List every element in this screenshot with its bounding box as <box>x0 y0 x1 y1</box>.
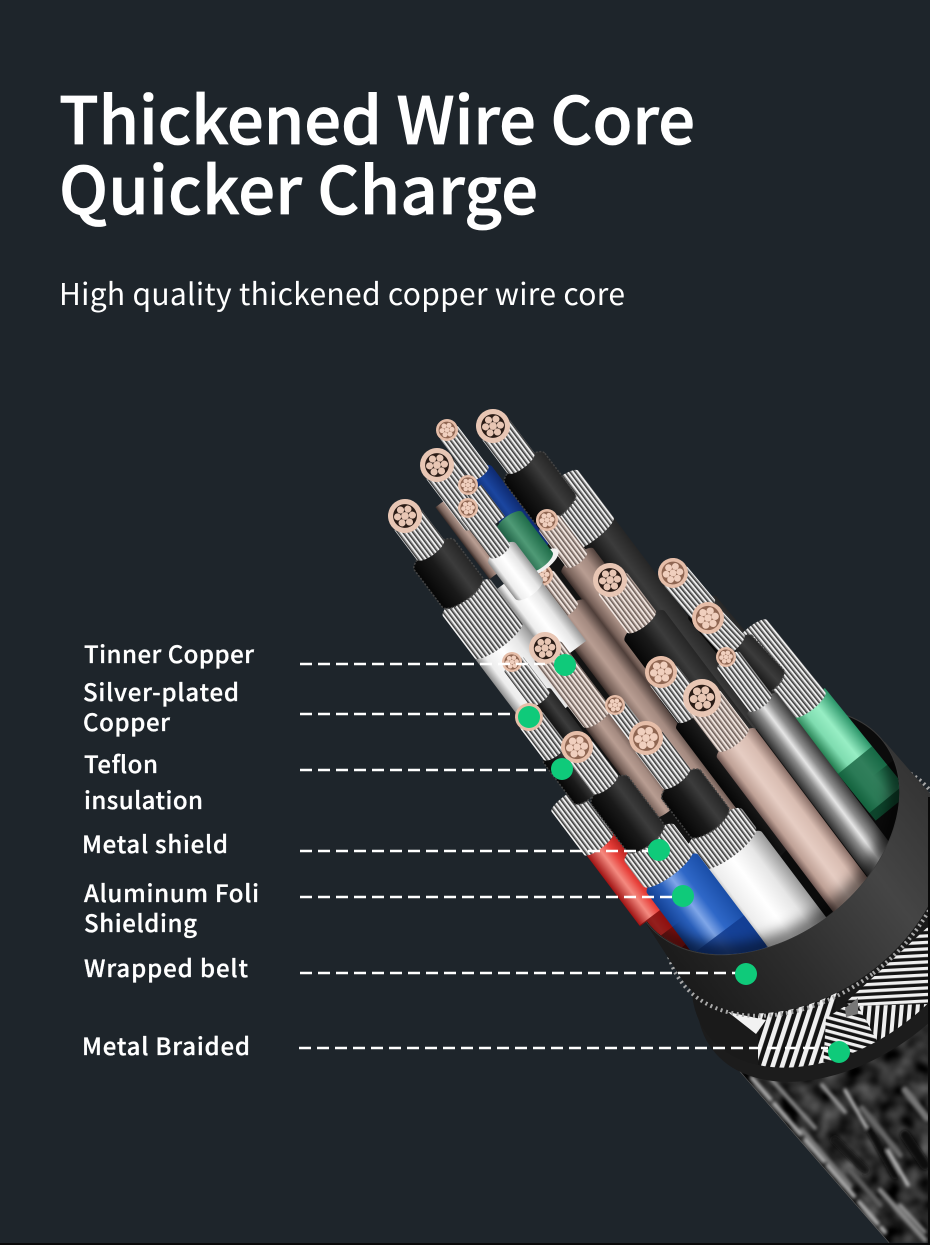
label: Aluminum Foli Shielding: Aluminum Foli <box>84 874 259 909</box>
white outer tube <box>497 583 586 653</box>
title <box>59 69 695 233</box>
metal cup outer wall <box>576 654 930 1069</box>
green wire <box>458 475 563 580</box>
white wire <box>458 498 543 600</box>
black tube and shield upper back <box>560 470 756 729</box>
upper-left wire <box>420 448 470 531</box>
title: Thickened Wire Core <box>59 69 695 163</box>
label: Metal Braided: Metal Braided <box>82 1027 250 1062</box>
blue wire <box>436 419 548 546</box>
green tube group <box>742 619 899 820</box>
blue tube <box>561 731 768 954</box>
brown strip behind white wire <box>436 502 496 579</box>
inner cup shadow <box>661 765 899 954</box>
label: Silver-plated Copper: Copper <box>83 703 170 738</box>
label: Silver-plated Copper <box>83 673 540 738</box>
label: Silver-plated Copper: Silver-plated <box>83 673 239 708</box>
right edge strip <box>928 797 930 1245</box>
braided cable body <box>740 1024 928 1243</box>
label: Teflon insulation: Teflon <box>84 745 158 780</box>
label: Tinner Copper <box>84 635 576 676</box>
subtitle: High quality thickened copper wire core <box>59 270 625 314</box>
dark collar <box>646 757 930 1137</box>
black wire with red below <box>515 703 594 806</box>
label: Aluminum Foli Shielding: Shielding <box>84 904 197 939</box>
title: Quicker Charge <box>59 139 538 233</box>
label: Teflon insulation <box>84 745 573 816</box>
brown wire centre <box>538 566 736 810</box>
silver tube <box>716 647 888 876</box>
white tube <box>629 721 826 950</box>
bottom edge strip <box>0 1243 930 1245</box>
black jacket upper right <box>692 602 785 693</box>
label: Tinner Copper: Tinner Copper <box>84 635 254 670</box>
pink tube <box>683 679 867 912</box>
label: Metal Braided <box>82 1027 850 1063</box>
dark bundle silhouette <box>532 519 716 776</box>
label: Metal shield <box>82 825 670 861</box>
left black and white wire <box>388 499 568 713</box>
label: Wrapped belt <box>84 949 757 985</box>
copper wire bundle <box>388 409 899 954</box>
label: Teflon insulation: insulation <box>84 781 203 816</box>
black wire centre <box>645 656 758 830</box>
small tip wire left <box>502 652 584 739</box>
label: Aluminum Foli Shielding <box>84 874 694 939</box>
red tube <box>551 794 690 950</box>
small tip over brown tube <box>605 695 640 740</box>
metal braided ring <box>692 928 928 1068</box>
label: Wrapped belt: Wrapped belt <box>84 949 248 984</box>
black wire with pink strands <box>593 563 752 728</box>
black wire upper back <box>476 409 576 526</box>
label: Metal shield: Metal shield <box>82 825 228 860</box>
pink wire rear <box>536 509 661 700</box>
black wire right back <box>658 558 774 694</box>
brown wire lower with pink strands <box>529 632 670 817</box>
